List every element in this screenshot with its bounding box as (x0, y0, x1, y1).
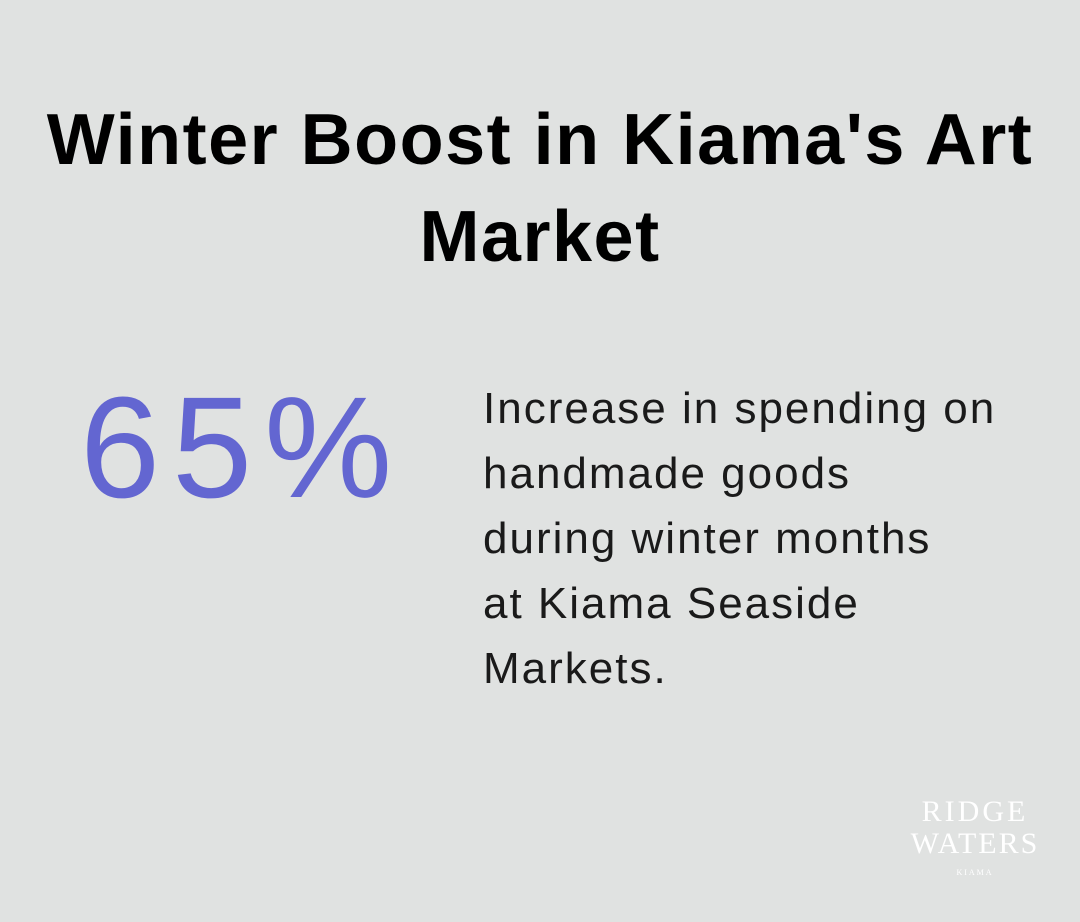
description text: Increase in spending on (483, 384, 996, 433)
statistic: 65%: 65% (80, 367, 404, 528)
logo: Ridge Waters Kiama (910, 795, 1039, 877)
logo: Ridge Waters Kiama: RIDGE (922, 795, 1028, 828)
description text (483, 384, 996, 693)
description text: Markets. (483, 644, 668, 693)
description text: during winter months (483, 514, 931, 563)
description text: handmade goods (483, 449, 851, 498)
title: Market (419, 197, 661, 277)
title: Winter Boost in Kiama's Art (47, 100, 1033, 180)
logo: Ridge Waters Kiama: WATERS (911, 827, 1039, 860)
logo: Ridge Waters Kiama: KIAMA (956, 868, 994, 877)
title (46, 100, 1033, 277)
description text: at Kiama Seaside (483, 579, 860, 628)
